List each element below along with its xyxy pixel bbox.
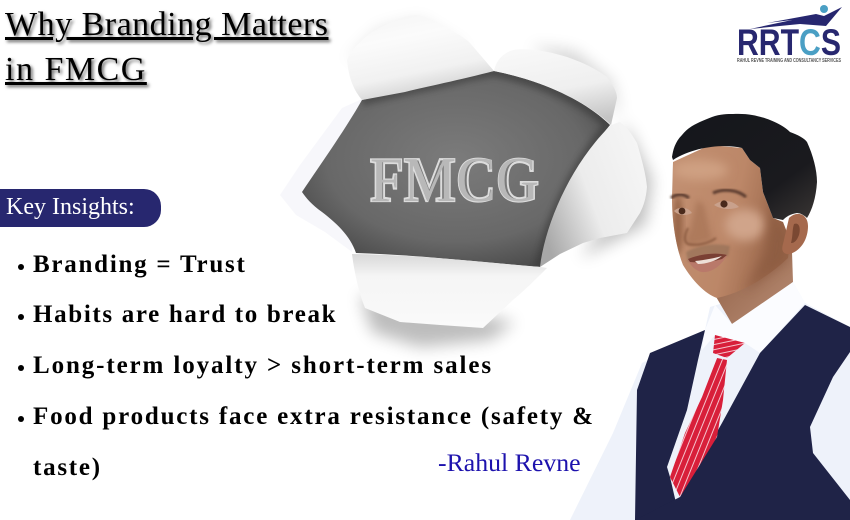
- title: [5, 6, 332, 90]
- bullet: loyalty: Long-term loyalty > short-term sales: [33, 352, 493, 379]
- nose: [685, 228, 716, 245]
- face shading: [672, 160, 790, 292]
- ear: [782, 214, 808, 254]
- mouth: [688, 254, 727, 272]
- paper rim: [280, 99, 362, 252]
- right paper flap: [540, 122, 647, 267]
- top paper flap: [347, 15, 494, 100]
- title: in FMCG: [5, 51, 147, 88]
- soft shadows around the flaps: [345, 18, 652, 347]
- key insights pill: [0, 189, 161, 227]
- face: [672, 145, 790, 298]
- bullet: branding: Branding = Trust: [33, 251, 247, 278]
- inner hole shadow: [362, 71, 610, 267]
- top right paper flap: [494, 49, 617, 125]
- key insights pill: Key Insights:: [6, 194, 135, 220]
- logo: RRTCS: [737, 5, 842, 64]
- torn paper hole illustration: [18, 21, 659, 368]
- bullet: habits: Habits are hard to break: [33, 301, 337, 328]
- bullet dots: [18, 264, 24, 422]
- left vest panel: [635, 330, 705, 520]
- teeth: [695, 256, 722, 264]
- right vest panel: [635, 305, 850, 520]
- eyes and brows: [671, 190, 746, 215]
- lip line: [688, 254, 727, 262]
- neck: [715, 245, 793, 324]
- tie: [670, 335, 745, 497]
- title: Why Branding Matters: [5, 6, 328, 43]
- portrait of Rahul Revne: [570, 114, 850, 520]
- signature: -Rahul Revne: [438, 448, 581, 477]
- logo wordmark: RRTCS: [737, 22, 841, 63]
- shirt: [570, 282, 850, 520]
- hair: [672, 114, 817, 220]
- bottom paper flap: [352, 254, 547, 328]
- inner ear: [791, 224, 800, 243]
- collar: [702, 282, 805, 353]
- dark hole: [302, 71, 610, 267]
- FMCG lettering: FMCG: [370, 145, 539, 215]
- bullet continuation: taste): [33, 454, 102, 481]
- bullet list: [18, 251, 595, 481]
- bullet: food products: Food products face extra resistance (safety &: [33, 403, 595, 430]
- logo swoosh: [750, 5, 842, 29]
- FMCG lettering: FMCG: [370, 145, 539, 215]
